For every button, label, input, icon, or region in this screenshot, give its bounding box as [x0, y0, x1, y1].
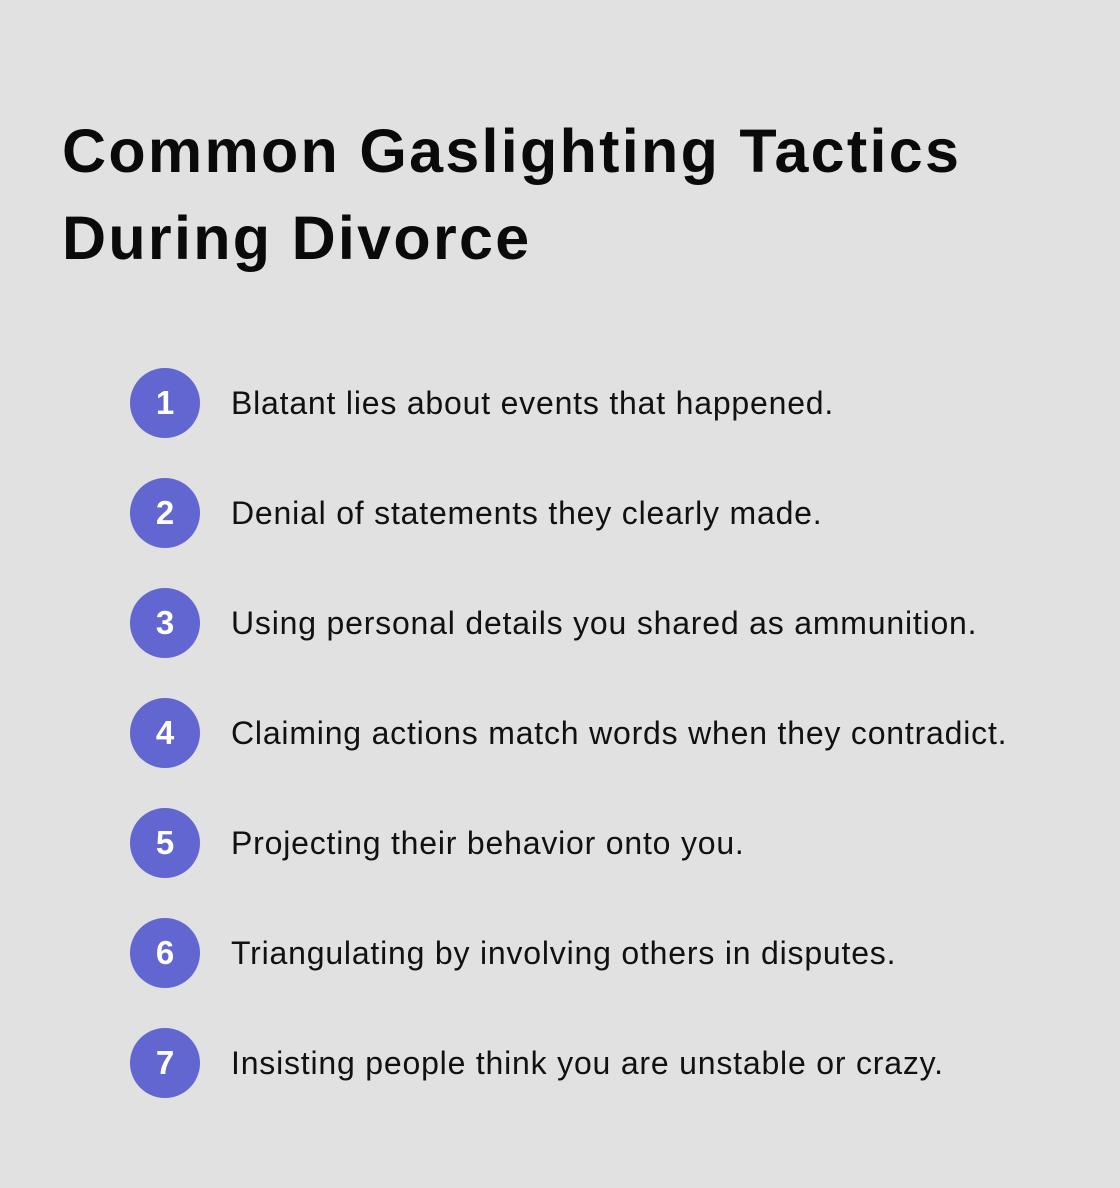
- item 3: 3: [156, 604, 174, 641]
- item 7: [130, 1028, 944, 1098]
- item 6: [130, 918, 896, 988]
- item 3: [130, 588, 977, 658]
- item 5: Projecting their behavior onto you.: [231, 825, 745, 861]
- item 6: Triangulating by involving others in disputes.: [231, 935, 896, 971]
- item 2: Denial of statements they clearly made.: [231, 495, 822, 531]
- title: During Divorce: [62, 204, 531, 272]
- item 5: 5: [156, 824, 174, 861]
- item 2: [130, 478, 822, 548]
- item 1: [130, 368, 834, 438]
- list of tactics: [130, 368, 1007, 1098]
- item 4: [130, 698, 1007, 768]
- item 5: [130, 808, 745, 878]
- item 4: Claiming actions match words when they contradict.: [231, 715, 1007, 751]
- item 7: 7: [156, 1044, 174, 1081]
- item 1: 1: [156, 384, 174, 421]
- item 1: Blatant lies about events that happened.: [231, 385, 834, 421]
- item 6: 6: [156, 934, 174, 971]
- item 7: Insisting people think you are unstable or crazy.: [231, 1045, 944, 1081]
- title: Common Gaslighting Tactics: [62, 117, 961, 185]
- item 3: Using personal details you shared as ammunition.: [231, 605, 977, 641]
- item 4: 4: [156, 714, 174, 751]
- item 2: 2: [156, 494, 174, 531]
- title: [62, 117, 961, 272]
